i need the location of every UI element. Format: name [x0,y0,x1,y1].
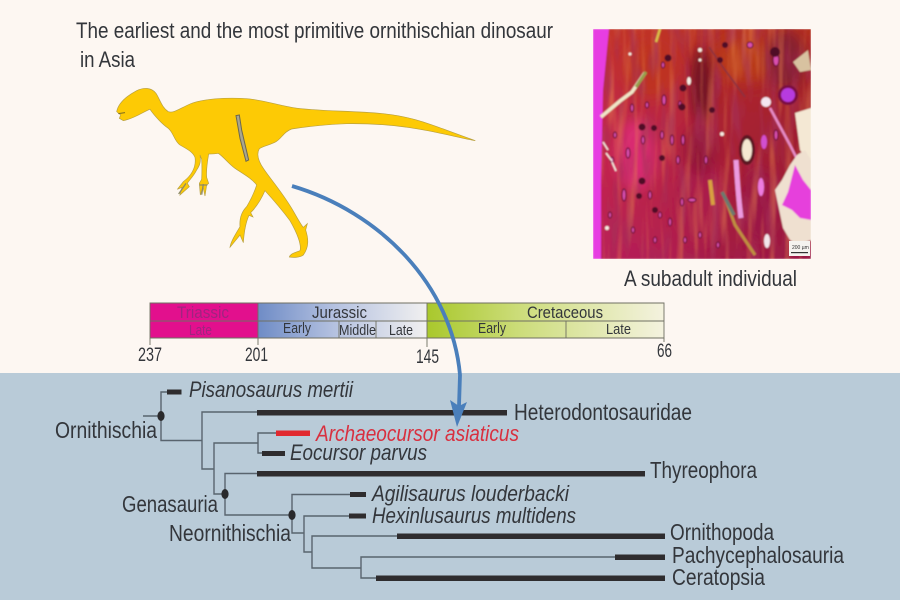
background: lower blue panel [0,373,900,600]
tree branches [143,392,615,578]
clade labels: Ceratopsia [672,564,766,590]
arrow: from dinosaur to its place on the tree [292,186,467,427]
period: Jurassic: Middle [339,322,376,339]
red range bar: Archaeocursor [276,430,310,436]
clade labels [55,399,845,590]
species labels: Eocursor parvus [290,440,427,465]
geologic time bar [138,303,672,368]
period: Triassic: Late [189,322,212,339]
cracks [601,73,645,117]
photo caption: A subadult individual [624,266,797,291]
period: Cretaceous: Early [478,320,506,337]
title: The earliest and the most primitive ornithischian dinosaur [76,18,553,43]
species labels: Agilisaurus louderbacki [370,481,570,506]
left magenta strip [593,29,609,259]
age labels: 145 [416,347,439,368]
age labels: 66 [657,341,672,362]
icon: fossil bone on dinosaur [236,115,249,161]
clade labels: Ornithopoda [670,519,775,545]
clade labels: Thyreophora [650,457,758,483]
period: Jurassic [258,303,427,339]
species labels: Pisanosaurus mertii [189,377,354,402]
taxon range bars [167,390,665,581]
age labels [138,341,672,368]
background: upper cream area [0,0,900,373]
white and pink voids [795,108,811,165]
clade nodes [157,411,296,520]
clade labels: Ornithischia [55,417,158,443]
cladogram [55,377,845,590]
icon: yellow dinosaur silhouette [117,88,475,257]
species labels: Archaeocursor asiaticus [314,421,519,446]
period: Jurassic: Early [283,320,311,337]
species labels: Hexinlusaurus multidens [372,503,576,528]
clade labels: Neornithischia [169,520,292,546]
photo: bone histology micrograph [593,29,811,259]
scale bar [789,241,810,256]
period: Jurassic: Jurassic [312,303,367,322]
lacunae [608,42,779,248]
period: Jurassic: Late [389,322,413,339]
period: Cretaceous [427,303,664,338]
clade labels: Heterodontosauridae [514,399,692,425]
age labels: 201 [245,345,268,366]
title [76,18,553,72]
clade labels: Genasauria [122,491,219,517]
period: Cretaceous: Late [606,321,631,338]
species labels [189,377,576,528]
period: Triassic: Triassic [177,303,229,322]
clade labels: Pachycephalosauria [672,542,845,568]
scale bar: 200 µm [792,245,809,251]
period: Triassic [150,303,258,339]
title: in Asia [80,47,135,72]
period: Cretaceous: Cretaceous [527,303,603,322]
age labels: 237 [138,345,162,366]
